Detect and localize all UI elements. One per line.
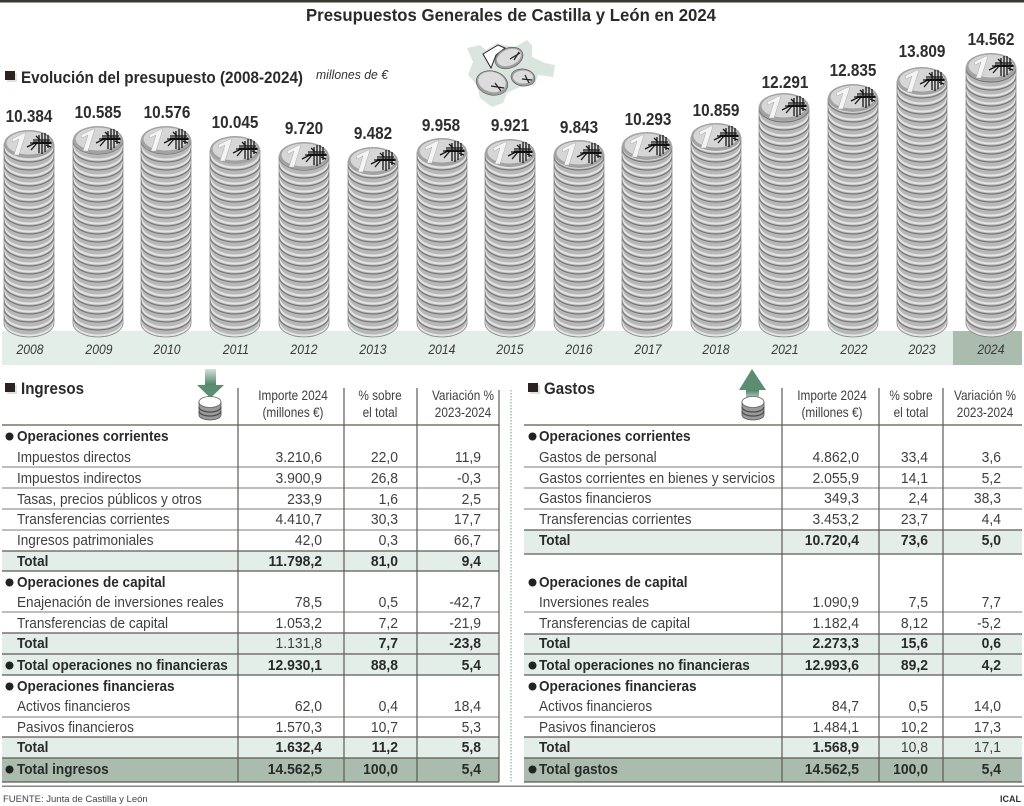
- row: gastos de personal: 33,4: [901, 450, 928, 466]
- column 2022: 12.835: [828, 60, 878, 357]
- row: total financieras: Total: [17, 739, 48, 756]
- column headers: Variación %: [954, 388, 1016, 403]
- row: pasivos financieros: Pasivos financieros: [539, 719, 656, 736]
- row: tasas: [17, 491, 481, 508]
- row: pasivos financieros: 1.570,3: [276, 720, 322, 736]
- row: total financieras: [539, 739, 1001, 756]
- row: total no financieras: [528, 657, 1001, 674]
- row: enajenación: [17, 594, 481, 611]
- column 2008: 10.384: 10.384: [6, 106, 53, 126]
- column 2021: 12.291: 12.291: [762, 72, 808, 92]
- row: transferencias corrientes: Transferencias corrientes: [17, 511, 170, 528]
- row: pasivos financieros: [539, 719, 1001, 736]
- column 2010: 10.576: 2010: [153, 341, 181, 357]
- row: total capital: 1.131,8: [276, 636, 322, 652]
- column 2024: 14.562: [966, 29, 1016, 357]
- column 2008: 10.384: [4, 106, 54, 357]
- column 2009: 10.585: 10.585: [75, 102, 121, 122]
- row: pasivos financieros: 10,2: [901, 720, 928, 736]
- row: pasivos financieros: 17,3: [974, 720, 1001, 736]
- column 2015: 9.921: 9.921: [491, 115, 529, 135]
- row: transferencias de capital: Transferencias de capital: [539, 615, 690, 632]
- row: impuestos directos: 22,0: [371, 450, 398, 466]
- row: total financieras: Total: [539, 739, 570, 756]
- row: transferencias corrientes: 4,4: [982, 512, 1001, 528]
- row: total capital: Total: [539, 635, 570, 652]
- column 2021: 12.291: [759, 72, 809, 357]
- section: operaciones financieras: Operaciones financieras: [539, 678, 697, 695]
- column headers: % sobre: [889, 388, 933, 403]
- row: total financieras: [17, 739, 481, 756]
- row: impuestos indirectos: Impuestos indirectos: [17, 470, 141, 487]
- row: total no financieras: Total operaciones no financieras: [539, 657, 750, 674]
- row: total no financieras: 5,4: [462, 658, 481, 674]
- row: tasas: 2,5: [462, 492, 481, 508]
- row: gastos de personal: 4.862,0: [813, 450, 859, 466]
- row: pasivos financieros: [17, 719, 481, 736]
- column 2011: 10.045: 10.045: [212, 112, 258, 132]
- row: total capital: -23,8: [449, 636, 481, 652]
- row: gastos corrientes: 2.055,9: [813, 471, 859, 487]
- row: transferencias corrientes: [539, 511, 1001, 528]
- row: pasivos financieros: Pasivos financieros: [17, 719, 134, 736]
- row: total financieras: 5,8: [462, 740, 481, 756]
- row: total financieras: 10,8: [901, 740, 928, 756]
- section: operaciones corrientes: Operaciones corrientes: [539, 428, 691, 445]
- row: inversiones reales: Inversiones reales: [539, 594, 649, 611]
- row: total gastos: 14.562,5: [805, 762, 859, 778]
- row: enajenación: 0,5: [379, 595, 398, 611]
- column headers: 2023-2024: [957, 405, 1013, 420]
- row: tasas: Tasas, precios públicos y otros: [17, 491, 202, 508]
- column 2010: 10.576: [141, 102, 191, 357]
- section: operaciones de capital: Operaciones de capital: [17, 574, 166, 591]
- row: total no financieras: [6, 657, 481, 674]
- row: activos financieros: [539, 698, 1001, 715]
- row: transferencias corrientes: Transferencias corrientes: [539, 511, 692, 528]
- map icon with coins: [467, 40, 555, 107]
- column 2021: 12.291: 2021: [770, 341, 798, 357]
- row: total corrientes: 11.798,2: [269, 554, 322, 570]
- row: enajenación: Enajenación de inversiones reales: [17, 594, 224, 611]
- row: total capital: 15,6: [901, 636, 928, 652]
- column 2022: 12.835: 12.835: [830, 60, 876, 80]
- row: impuestos directos: Impuestos directos: [17, 449, 131, 466]
- row: impuestos indirectos: 3.900,9: [276, 471, 322, 487]
- row: total ingresos: 100,0: [363, 762, 398, 778]
- row: activos financieros: [17, 698, 481, 715]
- column 2023: 13.809: 2023: [908, 341, 936, 357]
- column 2014: 9.958: 9.958: [422, 115, 460, 135]
- row: ingresos patrimoniales: 66,7: [454, 533, 481, 549]
- row: total capital: 0,6: [982, 636, 1001, 652]
- row: total capital: 2.273,3: [813, 636, 859, 652]
- row: activos financieros: 62,0: [295, 699, 322, 715]
- column 2022: 12.835: 2022: [840, 341, 868, 357]
- row: total no financieras: 4,2: [982, 658, 1001, 674]
- row: gastos financieros: Gastos financieros: [539, 490, 651, 507]
- heading: ingresos: Ingresos: [21, 380, 84, 398]
- row: total financieras: 1.568,9: [813, 740, 859, 756]
- row: total financieras: 1.632,4: [276, 740, 322, 756]
- row: transferencias corrientes: 4.410,7: [276, 512, 322, 528]
- column headers: el total: [363, 405, 397, 420]
- column 2014: 9.958: [417, 115, 467, 357]
- row: transferencias de capital: Transferencias de capital: [17, 615, 168, 632]
- column headers: (millones €): [802, 405, 862, 420]
- row: ingresos patrimoniales: Ingresos patrimoniales: [17, 532, 154, 549]
- row highlight bands: [524, 530, 1022, 782]
- column 2016: 9.843: [554, 117, 604, 357]
- row: total corrientes: 9,4: [462, 554, 481, 570]
- row: total no financieras: Total operaciones no financieras: [17, 657, 228, 674]
- row: gastos corrientes: 14,1: [901, 471, 928, 487]
- column 2017: 10.293: 10.293: [625, 109, 671, 129]
- row: transferencias corrientes: 23,7: [901, 512, 928, 528]
- row: total gastos: 5,4: [982, 762, 1001, 778]
- row: total capital: [539, 635, 1001, 652]
- heading: gastos: Gastos: [544, 380, 595, 398]
- column 2023: 13.809: 13.809: [899, 41, 945, 61]
- row: transferencias de capital: -21,9: [449, 616, 481, 632]
- row: activos financieros: Activos financieros: [539, 698, 652, 715]
- row: tasas: 233,9: [287, 492, 322, 508]
- row: pasivos financieros: 1.484,1: [813, 720, 859, 736]
- row: transferencias de capital: 1.182,4: [813, 616, 859, 632]
- row: total corrientes: Total: [539, 532, 570, 549]
- row: activos financieros: Activos financieros: [17, 698, 130, 715]
- row: transferencias corrientes: 17,7: [454, 512, 481, 528]
- row: activos financieros: 0,4: [379, 699, 398, 715]
- column 2018: 10.859: [691, 100, 741, 357]
- row: transferencias corrientes: [17, 511, 481, 528]
- column 2010: 10.576: 10.576: [144, 102, 190, 122]
- row: total corrientes: 73,6: [901, 533, 928, 549]
- row: total corrientes: 81,0: [371, 554, 398, 570]
- column 2024: 14.562: 2024: [976, 341, 1004, 357]
- row: total ingresos: Total ingresos: [17, 761, 109, 778]
- year band: [2, 331, 1022, 365]
- row: total ingresos: 5,4: [462, 762, 481, 778]
- row: impuestos indirectos: [17, 470, 481, 487]
- row: total financieras: 11,2: [372, 740, 398, 756]
- column headers: 2023-2024: [435, 405, 491, 420]
- column 2014: 9.958: 2014: [427, 341, 455, 357]
- icon: arrow down into coins: [197, 369, 224, 420]
- row: impuestos directos: 3.210,6: [276, 450, 322, 466]
- column headers: [797, 388, 1016, 420]
- column 2013: 9.482: 9.482: [354, 123, 392, 143]
- row: activos financieros: 0,5: [909, 699, 928, 715]
- column 2011: 10.045: [210, 112, 260, 357]
- column headers: Importe 2024: [797, 388, 867, 403]
- row: total corrientes: [17, 553, 481, 570]
- icon: arrow up out of coins: [739, 369, 766, 420]
- row: activos financieros: 18,4: [454, 699, 481, 715]
- row: inversiones reales: 7,7: [982, 595, 1001, 611]
- row: gastos de personal: [539, 449, 1001, 466]
- row: total gastos: Total gastos: [539, 761, 618, 778]
- column 2011: 10.045: 2011: [222, 341, 249, 357]
- row: pasivos financieros: 10,7: [371, 720, 398, 736]
- row: gastos financieros: [539, 490, 1001, 507]
- row: impuestos indirectos: 26,8: [371, 471, 398, 487]
- column headers: el total: [894, 405, 928, 420]
- row: inversiones reales: [539, 594, 1001, 611]
- panel: ingresos: [2, 369, 499, 782]
- row: gastos financieros: 38,3: [974, 491, 1001, 507]
- row: total financieras: 17,1: [974, 740, 1001, 756]
- unit note: millones de €: [316, 68, 389, 82]
- column headers: (millones €): [263, 405, 323, 420]
- column 2017: 10.293: 2017: [634, 341, 662, 357]
- row: transferencias de capital: 1.053,2: [276, 616, 322, 632]
- row: total no financieras: 88,8: [371, 658, 398, 674]
- row: total corrientes: 10.720,4: [805, 533, 859, 549]
- row: ingresos patrimoniales: 42,0: [295, 533, 322, 549]
- row: pasivos financieros: 5,3: [462, 720, 481, 736]
- column 2012: 9.720: [279, 118, 329, 357]
- row: gastos corrientes: [539, 470, 1001, 487]
- row: impuestos indirectos: -0,3: [457, 471, 481, 487]
- row: enajenación: -42,7: [449, 595, 481, 611]
- row: tasas: 1,6: [379, 492, 398, 508]
- column 2009: 10.585: 2009: [85, 341, 113, 357]
- row: total corrientes: 5,0: [982, 533, 1001, 549]
- row: inversiones reales: 7,5: [909, 595, 928, 611]
- row: activos financieros: 84,7: [832, 699, 859, 715]
- credit: ICAL: [1000, 794, 1021, 804]
- row: total capital: [17, 635, 481, 652]
- row: transferencias de capital: [17, 615, 481, 632]
- row: ingresos patrimoniales: 0,3: [379, 533, 398, 549]
- row: enajenación: 78,5: [295, 595, 322, 611]
- row: total gastos: 100,0: [893, 762, 928, 778]
- column 2016: 9.843: 2016: [565, 341, 593, 357]
- row: transferencias de capital: 8,12: [901, 616, 928, 632]
- column headers: Importe 2024: [258, 388, 328, 403]
- row: total corrientes: [539, 532, 1001, 549]
- row: gastos corrientes: Gastos corrientes en bienes y servicios: [539, 470, 775, 487]
- column 2013: 9.482: 2013: [359, 341, 387, 357]
- row: total no financieras: 12.930,1: [268, 658, 322, 674]
- row: total no financieras: 89,2: [901, 658, 928, 674]
- row: transferencias de capital: [539, 615, 1001, 632]
- column 2015: 9.921: [485, 115, 535, 357]
- chart heading: evolución del presupuesto: Evolución del presupuesto (2008-2024): [21, 68, 303, 87]
- row: gastos de personal: 3,6: [982, 450, 1001, 466]
- column 2012: 9.720: 2012: [290, 341, 318, 357]
- row: total ingresos: [6, 761, 481, 778]
- column 2018: 10.859: 2018: [702, 341, 730, 357]
- column 2012: 9.720: 9.720: [285, 118, 323, 138]
- row: transferencias corrientes: 30,3: [371, 512, 398, 528]
- top rule: [0, 0, 1024, 2]
- row: gastos financieros: 2,4: [909, 491, 928, 507]
- column 2024: 14.562: 14.562: [968, 29, 1014, 49]
- row: total corrientes: Total: [17, 553, 48, 570]
- row: total capital: 7,7: [379, 636, 398, 652]
- row: gastos de personal: Gastos de personal: [539, 449, 657, 466]
- section: operaciones de capital: Operaciones de capital: [539, 574, 688, 591]
- row: transferencias de capital: 7,2: [379, 616, 398, 632]
- row: impuestos directos: [17, 449, 481, 466]
- panel: gastos: [524, 369, 1022, 782]
- row: total ingresos: 14.562,5: [268, 762, 322, 778]
- column headers: % sobre: [358, 388, 402, 403]
- title: Presupuestos Generales de Castilla y León en 2024: [306, 5, 716, 25]
- column headers: Variación %: [432, 388, 494, 403]
- row highlight bands: [2, 551, 499, 782]
- section: operaciones corrientes: Operaciones corrientes: [17, 428, 169, 445]
- row: inversiones reales: 1.090,9: [813, 595, 859, 611]
- section: operaciones financieras: Operaciones financieras: [17, 678, 175, 695]
- column 2023: 13.809: [897, 41, 947, 357]
- row: activos financieros: 14,0: [974, 699, 1001, 715]
- row: gastos corrientes: 5,2: [982, 471, 1001, 487]
- column 2013: 9.482: [348, 123, 398, 357]
- row: ingresos patrimoniales: [17, 532, 481, 549]
- row: impuestos directos: 11,9: [455, 450, 481, 466]
- column 2009: 10.585: [73, 102, 123, 357]
- column 2018: 10.859: 10.859: [693, 100, 739, 120]
- row: total capital: Total: [17, 635, 48, 652]
- row: transferencias corrientes: 3.453,2: [813, 512, 859, 528]
- column 2015: 9.921: 2015: [496, 341, 524, 357]
- column 2008: 10.384: 2008: [16, 341, 44, 357]
- column headers: [258, 388, 494, 420]
- column 2017: 10.293: [622, 109, 672, 357]
- row: gastos financieros: 349,3: [824, 491, 859, 507]
- row: total gastos: [528, 761, 1001, 778]
- row: transferencias de capital: -5,2: [977, 616, 1001, 632]
- column 2016: 9.843: 9.843: [560, 117, 598, 137]
- row: total no financieras: 12.993,6: [805, 658, 859, 674]
- source: FUENTE: Junta de Castilla y León: [3, 794, 148, 805]
